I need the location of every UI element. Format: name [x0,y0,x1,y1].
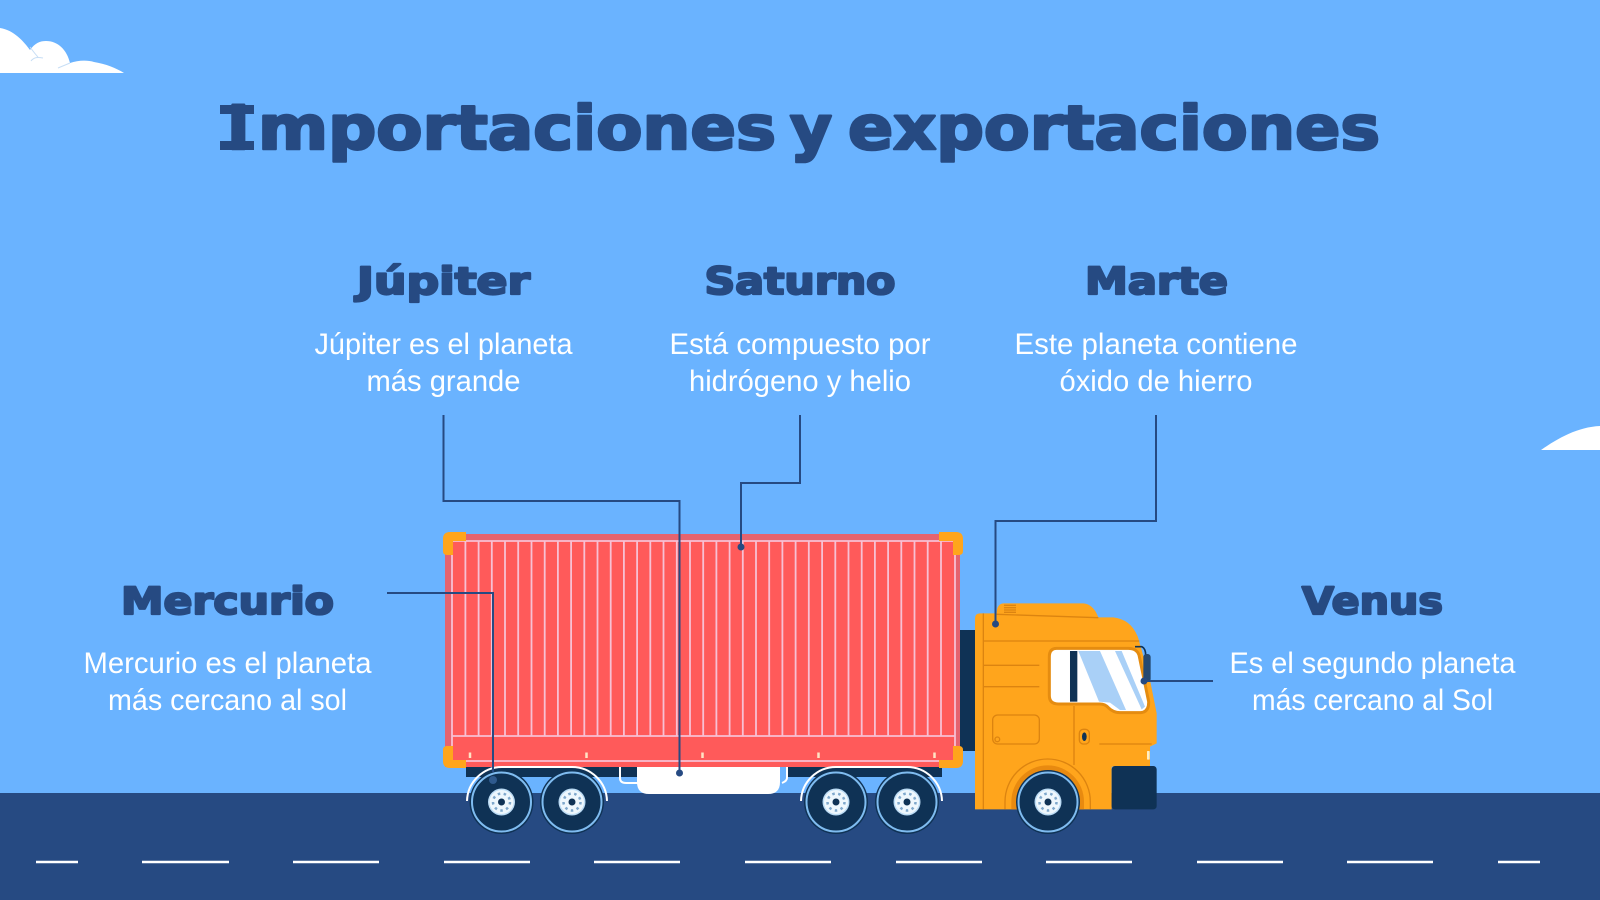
corner castings [443,532,963,768]
text: Saturno description: Está compuesto por [670,328,931,361]
text: Venus description: más cercano al Sol [1252,684,1493,717]
wheel 3 [804,770,868,834]
cloud: right [1541,426,1600,450]
text: Mercurio description: Mercurio es el planeta [84,647,372,680]
heading: Marte: Marte [1085,260,1228,303]
leader line: Júpiter [444,415,683,776]
wheel 1 [470,770,534,834]
cloud: top left [0,28,124,73]
truck [443,532,1157,834]
text: Marte description: óxido de hierro [1060,365,1252,398]
heading: Venus: Venus [1302,580,1443,623]
title: y [790,93,832,164]
text: Marte description: Este planeta contiene [1014,328,1298,361]
title: mportaciones [258,93,776,164]
text: Saturno description: hidrógeno y helio [689,365,911,398]
leader line: Marte [992,415,1156,628]
cab [975,603,1157,809]
container ribs [452,541,955,761]
leader line: Mercurio [387,593,497,784]
text: Venus description: Es el segundo planeta [1230,647,1516,680]
title [220,93,1380,164]
hatch [993,715,1039,744]
heading: Saturno: Saturno [704,260,896,303]
hitch connector [960,630,976,751]
headlight [1147,751,1150,760]
panel: Marte [1014,260,1298,398]
panel: Venus [1230,580,1516,717]
container ticks [470,752,934,758]
mirror [1135,647,1151,682]
door handle [1079,729,1089,744]
bumper [1112,766,1157,809]
wheel arch [1005,759,1090,809]
heading: Mercurio: Mercurio [121,580,334,623]
fuel tank [637,767,780,794]
heading: Júpiter: Júpiter [353,260,531,303]
leader line: Saturno [738,415,800,550]
text: Mercurio description: más cercano al sol [108,684,347,717]
leader line: Venus [1140,678,1213,684]
windshield [1049,648,1149,713]
container [443,532,963,768]
wheel 4 [875,770,939,834]
road [0,793,1600,900]
title: exportaciones [848,93,1380,164]
title: I [227,93,250,164]
panel: Mercurio [84,580,372,717]
chassis [466,767,942,783]
wheel 5: cab [1016,770,1080,834]
text: Júpiter description: más grande [366,365,520,398]
wheel 2 [540,770,604,834]
panel: Júpiter [314,260,573,398]
panel: Saturno [670,260,931,398]
text: Júpiter description: Júpiter es el planeta [314,328,573,361]
wheel arches [467,767,942,801]
